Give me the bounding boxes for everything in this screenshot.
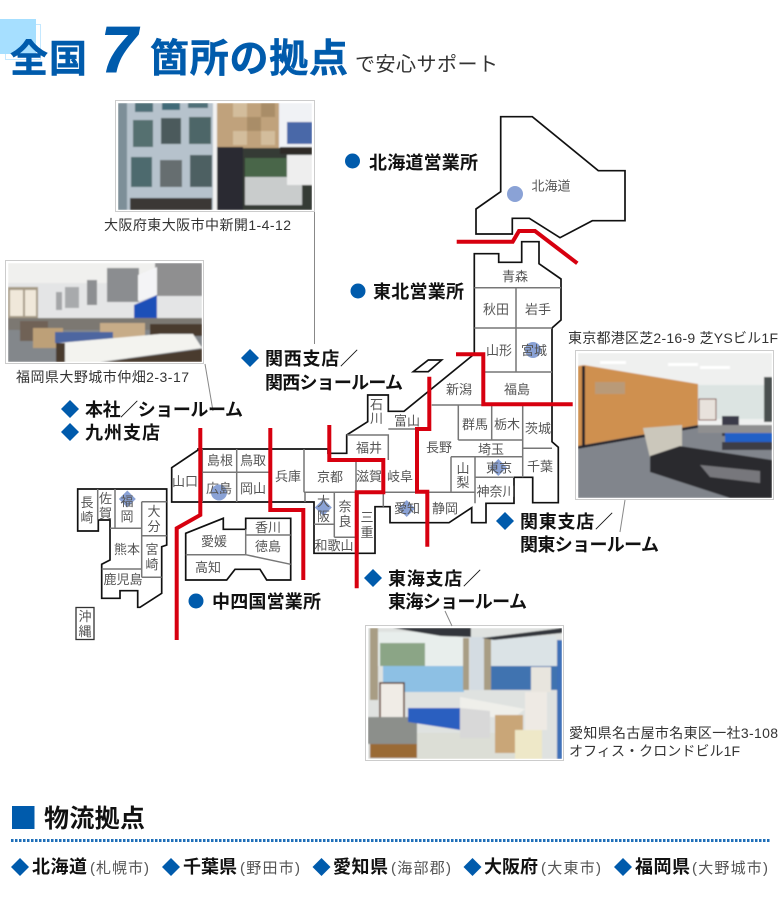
prefecture names: 秋田	[483, 302, 509, 317]
prefecture names	[78, 178, 571, 639]
label: Tohoku office: 東北営業所	[373, 282, 464, 302]
prefecture names: 東京	[486, 460, 512, 476]
prefecture names: 分	[147, 519, 161, 534]
address: Nagoya: 愛知県名古屋市名東区一社3-108	[569, 725, 778, 741]
logistics: Osaka	[464, 857, 601, 877]
region: Hokkaido	[476, 117, 625, 238]
prefecture names: 宮	[145, 542, 159, 557]
label: Kanto branch: 関東支店／	[520, 512, 613, 532]
prefecture names: 山形	[486, 343, 512, 358]
prefecture names: 山	[456, 461, 470, 476]
label: Tokai branch: 東海支店／	[388, 569, 481, 589]
prefecture names: 京都	[317, 470, 343, 484]
prefecture names: 賀	[99, 506, 112, 521]
region: Okinawa	[76, 608, 94, 640]
prefecture names: 大	[317, 494, 330, 509]
label: Kansai branch: 関西支店／	[265, 349, 358, 369]
logistics: Hokkaido	[11, 857, 149, 877]
prefecture names: 崎	[80, 510, 94, 525]
label: Hokkaido office: 北海道営業所	[369, 153, 478, 173]
prefecture names: 福	[120, 494, 134, 509]
prefecture names: 徳島	[255, 539, 281, 554]
prefecture names: 茨城	[525, 421, 551, 436]
connector: Nagoya photo	[445, 611, 452, 626]
red area boundaries	[177, 231, 577, 640]
prefecture names: 福島	[504, 382, 530, 397]
prefecture names: 石	[370, 397, 383, 412]
prefecture names: 神奈川	[476, 484, 516, 499]
prefecture names: 長	[80, 495, 94, 510]
address: Nagoya	[569, 725, 778, 759]
prefecture names: 岐阜	[387, 469, 413, 484]
prefecture names: 川	[370, 411, 383, 426]
dotted divider	[11, 839, 770, 842]
logistics: Chiba: (野田市)	[240, 860, 300, 877]
photo: Osaka showroom	[116, 100, 314, 212]
title	[0, 13, 498, 86]
label: Chushikoku office: 中四国営業所	[212, 592, 321, 612]
prefecture names: 梨	[456, 475, 470, 490]
prefecture names: 宮城	[521, 343, 547, 358]
logistics: Aichi: (海部郡)	[391, 860, 451, 877]
prefecture names: 富山	[394, 414, 420, 428]
label: head office and Kyushu branch: 本社／ショールーム	[85, 400, 243, 420]
prefecture names: 滋賀	[356, 469, 382, 484]
logistics: Osaka: (大東市)	[541, 860, 601, 877]
label: Tokai branch	[364, 569, 527, 612]
prefecture names: 鳥取	[240, 453, 266, 468]
prefecture names: 三	[360, 510, 374, 525]
prefecture names: 福井	[356, 440, 382, 456]
logistics: Chiba	[162, 857, 300, 877]
logistics: Hokkaido: 北海道	[32, 857, 87, 877]
prefecture names: 崎	[145, 557, 159, 572]
connector: Fukuoka photo	[205, 364, 213, 411]
prefecture names: 岩手	[525, 302, 551, 317]
logistics: Hokkaido: (札幌市)	[90, 860, 149, 877]
prefecture names: 兵庫	[275, 469, 301, 484]
prefecture names: 沖	[78, 609, 92, 624]
photo: Fukuoka showroom	[6, 260, 204, 364]
logistics: Chiba: 千葉県	[183, 857, 237, 877]
title: 全国: 全国	[10, 39, 87, 81]
map of Japan	[76, 117, 625, 640]
prefecture names: 新潟	[446, 382, 472, 397]
address: Osaka: 大阪府東大阪市中新開1-4-12	[104, 217, 291, 233]
prefecture names: 栃木	[494, 417, 520, 432]
label: Kansai branch	[241, 349, 403, 393]
photo: Tokyo showroom	[576, 350, 774, 500]
region: Kyushu	[78, 489, 167, 607]
connector: Osaka photo	[314, 212, 316, 344]
region: Honshu	[172, 242, 561, 553]
label: Kanto branch	[496, 512, 659, 555]
prefecture names: 北海道	[531, 178, 571, 194]
prefecture names: 和歌山	[314, 538, 354, 553]
prefecture names: 岡	[120, 509, 134, 524]
prefecture names: 重	[360, 525, 374, 540]
logistics: Aichi	[312, 857, 451, 877]
title accent square	[0, 19, 40, 60]
title: number 7: 7	[101, 13, 140, 86]
prefecture names: 青森	[502, 269, 528, 284]
logistics: Fukuoka	[614, 857, 768, 877]
label: Tokai branch: 東海ショールーム	[388, 592, 527, 612]
region: Shikoku	[186, 518, 291, 580]
address: Fukuoka: 福岡県大野城市仲畑2-3-17	[16, 369, 189, 385]
prefecture names: 熊本	[114, 542, 140, 557]
prefecture names: 千葉	[527, 459, 553, 474]
label: head office and Kyushu branch	[61, 400, 243, 443]
connector: Tokyo photo	[620, 500, 625, 532]
label: Kanto branch: 関東ショールーム	[520, 535, 659, 555]
title: 箇所の拠点: 箇所の拠点	[150, 38, 348, 81]
prefecture names: 山口	[172, 474, 198, 489]
prefecture names: 長野	[426, 440, 452, 455]
prefecture names: 阪	[317, 509, 330, 524]
prefecture names: 縄	[78, 624, 92, 639]
logistics: Fukuoka: 福岡県	[635, 857, 690, 877]
logistics heading: 物流拠点	[44, 805, 145, 833]
address: Nagoya: オフィス・クロンドビル1F	[569, 743, 740, 759]
label: Kansai branch: 関西ショールーム	[265, 373, 403, 393]
prefecture names: 愛媛	[201, 534, 227, 549]
photo: Nagoya showroom	[366, 626, 564, 760]
logistics: Fukuoka: (大野城市)	[692, 860, 768, 877]
markers: branch locations	[119, 186, 541, 517]
prefecture names: 奈	[338, 499, 352, 514]
prefecture names: 島根	[207, 453, 233, 468]
prefecture names: 香川	[255, 520, 281, 535]
prefecture names: 岡山	[240, 481, 266, 496]
prefecture names: 群馬	[462, 417, 488, 432]
subtitle: で安心サポート	[355, 53, 498, 76]
prefecture names: 高知	[195, 560, 221, 575]
prefecture names: 大	[147, 504, 161, 519]
logistics: Osaka: 大阪府	[484, 857, 538, 877]
prefecture names: 愛知	[394, 501, 420, 516]
prefecture names: 静岡	[432, 501, 458, 516]
logistics: Aichi: 愛知県	[333, 857, 388, 877]
label: head office and Kyushu branch: 九州支店	[85, 423, 160, 443]
section: logistics bases	[11, 805, 770, 877]
prefecture names: 佐	[99, 491, 112, 506]
prefecture names: 埼玉	[478, 442, 504, 457]
prefecture names: 良	[338, 514, 352, 529]
address: Tokyo: 東京都港区芝2-16-9 芝YSビル1F	[568, 330, 778, 346]
prefecture names: 鹿児島	[103, 572, 143, 587]
prefecture names: 広島	[206, 481, 232, 496]
